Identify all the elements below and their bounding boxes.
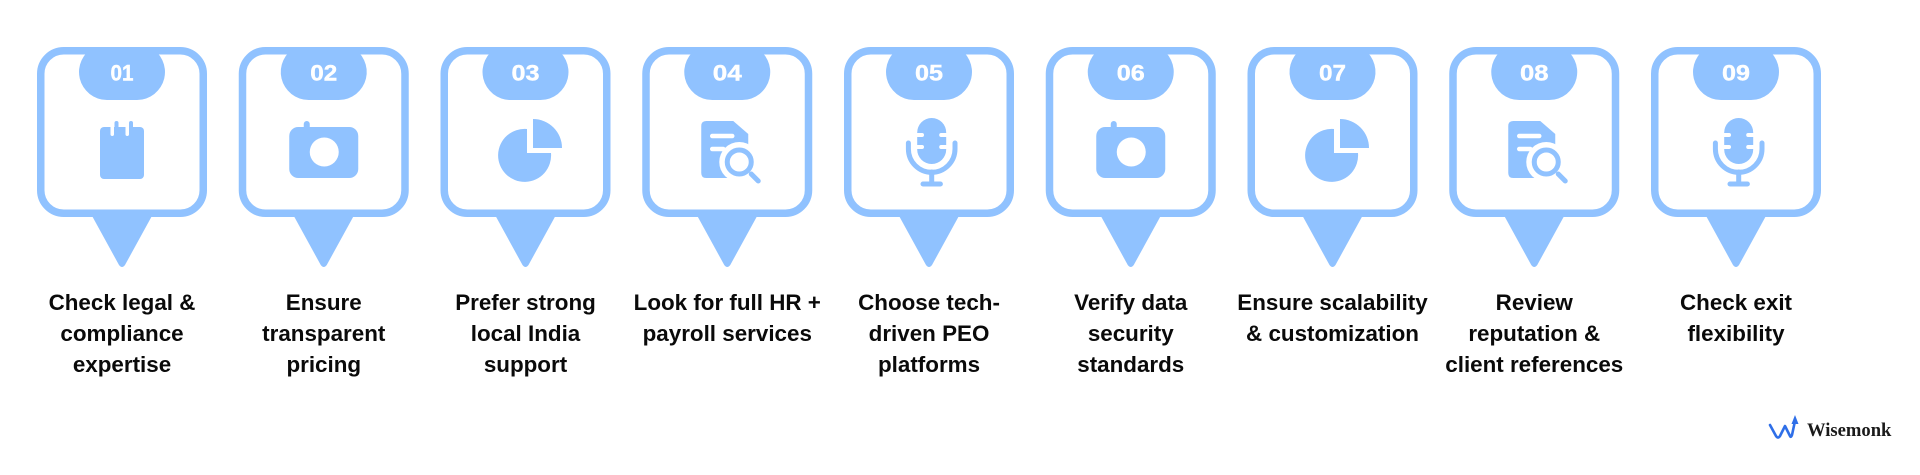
- number: 01: [110, 60, 134, 86]
- number badge: [886, 47, 972, 100]
- pointer: [898, 214, 960, 267]
- step 09: [1655, 47, 1817, 346]
- label: Verify data: [1074, 290, 1188, 315]
- icon: camera: [289, 121, 358, 178]
- brand logo: [1770, 415, 1892, 441]
- pointer: [293, 214, 355, 267]
- label: Choose tech-: [858, 290, 1000, 315]
- icon: document search: [1508, 121, 1566, 182]
- label: Ensure: [286, 290, 362, 315]
- label: Check exit: [1680, 290, 1793, 315]
- card frame: [1655, 51, 1817, 213]
- label: & customization: [1246, 321, 1419, 346]
- step 02: [242, 47, 405, 377]
- label: security: [1088, 321, 1174, 346]
- step 03: [444, 47, 607, 377]
- number badge: [1491, 47, 1577, 100]
- number badge: [281, 47, 367, 100]
- label: Check legal &: [49, 290, 195, 315]
- pointer: [1302, 214, 1364, 267]
- step 05: [848, 47, 1010, 377]
- icon: camera: [1096, 121, 1165, 178]
- label: Look for full HR +: [634, 290, 821, 315]
- card frame: [1050, 51, 1212, 213]
- number: 06: [1117, 60, 1145, 86]
- pointer: [1503, 214, 1565, 267]
- label: payroll services: [643, 321, 812, 346]
- card frame: [41, 51, 203, 213]
- label: compliance: [60, 321, 184, 346]
- card frame: [242, 51, 405, 213]
- step 08: [1445, 47, 1623, 377]
- label: pricing: [286, 352, 361, 377]
- label: expertise: [73, 352, 171, 377]
- card frame: [1453, 51, 1616, 213]
- label: reputation &: [1468, 321, 1600, 346]
- number badge: [483, 47, 568, 100]
- label: Prefer strong: [455, 290, 596, 315]
- pointer: [696, 214, 758, 267]
- number: 04: [713, 60, 743, 86]
- label: Ensure scalability: [1237, 290, 1428, 315]
- card frame: [646, 51, 808, 213]
- pointer: [494, 214, 556, 267]
- icon: notepad: [100, 121, 144, 179]
- pointer: [1705, 214, 1767, 267]
- step 06: [1050, 47, 1212, 377]
- number: 07: [1319, 60, 1346, 86]
- card frame: [444, 51, 607, 213]
- number: 02: [310, 60, 337, 86]
- label: client references: [1445, 352, 1623, 377]
- number: 09: [1722, 60, 1750, 86]
- label: flexibility: [1687, 321, 1785, 346]
- label: driven PEO: [869, 321, 989, 346]
- number: 08: [1520, 60, 1548, 86]
- icon: document search: [701, 121, 759, 182]
- step 01: [41, 47, 203, 377]
- icon: microphone: [1715, 118, 1762, 184]
- number badge: [1290, 47, 1375, 100]
- icon: pie chart: [1305, 119, 1369, 182]
- card frame: [1251, 51, 1414, 213]
- step 04: [634, 47, 821, 346]
- pointer: [1100, 214, 1162, 267]
- icon: rising line with arrow: [1770, 415, 1798, 438]
- wordmark: Wisemonk: [1807, 420, 1892, 441]
- number badge: [1088, 47, 1174, 100]
- label: transparent: [262, 321, 386, 346]
- step 07: [1237, 47, 1428, 346]
- label: platforms: [878, 352, 980, 377]
- label: support: [484, 352, 568, 377]
- label: local India: [471, 321, 581, 346]
- icon: pie chart: [498, 119, 562, 182]
- number badge: [1693, 47, 1779, 100]
- number: 03: [511, 60, 540, 86]
- pointer: [91, 214, 153, 267]
- icon: microphone: [908, 118, 955, 184]
- number: 05: [915, 60, 943, 86]
- number badge: [79, 47, 165, 100]
- label: standards: [1077, 352, 1184, 377]
- card frame: [848, 51, 1010, 213]
- label: Review: [1496, 290, 1573, 315]
- number badge: [684, 47, 770, 100]
